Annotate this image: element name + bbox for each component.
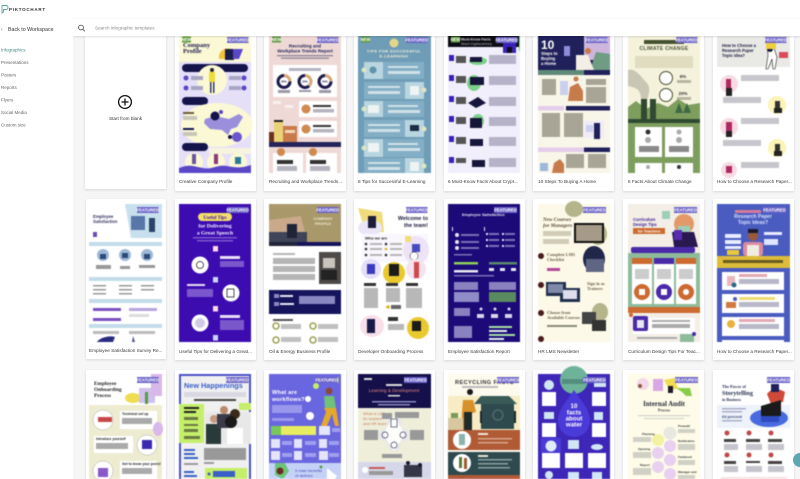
card: What are workflows: What are xyxy=(272,390,297,396)
card: Employee Onboarding Process: Get to know your peers! xyxy=(122,462,161,466)
card: Oil & Energy Business Profile xyxy=(264,199,346,360)
card: HR LMS Newsletter xyxy=(533,199,614,360)
card: 10 facts about water: 10 xyxy=(571,403,578,410)
card: Recruiting and Workplace Trends: Workplace Trends Report xyxy=(277,48,333,54)
card: Oil & Energy Business Profile: COMPANY xyxy=(313,217,333,221)
card: Learning and Development: Learning & Development xyxy=(369,388,420,393)
top header bar xyxy=(0,0,800,19)
card: The Power of Storytelling: The Power of xyxy=(722,384,746,389)
card: Internal Audit Process: Planning xyxy=(642,432,655,436)
card: 10 Steps To Buying A Home: Steps to xyxy=(541,51,558,56)
card: Useful Tips for Delivering a Great Speech: FEATURED xyxy=(226,208,249,212)
card: Useful Tips for Delivering a Great Speech: Useful Tips xyxy=(203,216,227,221)
card: How to Choose a Research Paper xyxy=(713,20,794,191)
card: Useful Tips for Delivering a Great Speech: for Delivering xyxy=(198,224,232,230)
card: Curriculum Design Tips: Curriculum xyxy=(633,217,656,222)
card: Developer Onboarding Process: the team! xyxy=(404,223,428,229)
card: How to Choose a Research Paper (blue): How to Choose a Research Paper... xyxy=(717,349,792,354)
sidebar navigation: Presentations xyxy=(1,60,29,65)
card: Internal Audit Process: Manager and xyxy=(678,470,697,474)
card: How to Choose a Research Paper: How to Choose a xyxy=(722,43,757,48)
card: 6 Facts About Climate Change: 6 Facts About Climate Change xyxy=(628,179,692,184)
card: Internal Audit Process: Report xyxy=(640,463,650,467)
card: HR LMS Newsletter: New Courses xyxy=(542,217,571,223)
card: Employee Satisfaction Survey: Employee xyxy=(93,214,114,219)
card: Curriculum Design Tips: FEATURED xyxy=(674,208,697,212)
card: 10 facts about water: facts xyxy=(567,410,582,416)
card: HR LMS Newsletter: HR LMS Newsletter xyxy=(538,349,580,354)
card: The Power of Storytelling: 63 percent xyxy=(722,414,743,419)
card: Internal Audit Process: Opening xyxy=(638,447,650,451)
card: 10 Steps To Buying A Home: Buying xyxy=(541,56,556,61)
card: Curriculum Design Tips: Design Tips xyxy=(633,222,657,227)
card: Recycling xyxy=(444,370,525,479)
card: Employee Satisfaction Report: FEATURED xyxy=(494,208,517,212)
card: Curriculum Design Tips xyxy=(623,199,704,360)
card: Internal Audit Process: Preaudit xyxy=(678,424,690,428)
card: Internal Audit Process: Notification xyxy=(678,439,695,443)
card: Employee Onboarding Process: Process xyxy=(94,393,111,399)
card: Recruiting and Workplace Trends: Recruiting and xyxy=(289,44,321,48)
card: What are workflows: workflows? xyxy=(271,397,305,403)
card: Developer Onboarding Process xyxy=(354,199,435,360)
card: HR LMS Newsletter: Checklist xyxy=(547,257,565,262)
card: Recruiting and Workplace Trends: NEW xyxy=(272,37,281,42)
card: 10 Steps To Buying A Home: 10 Steps To Buying A Home xyxy=(538,179,596,184)
card: Employee Satisfaction Survey xyxy=(86,199,166,359)
sidebar navigation: Posters xyxy=(1,72,17,78)
card: Useful Tips for Delivering a Great Speech xyxy=(175,199,256,360)
card: 10 Steps To Buying A Home: FEATURED xyxy=(585,38,608,42)
card: 10 Steps To Buying A Home: 10 xyxy=(541,38,555,52)
search bar xyxy=(73,19,800,36)
card: HR LMS Newsletter: Available Courses xyxy=(547,315,580,320)
card: How to Choose a Research Paper: Topic Idea? xyxy=(722,53,745,58)
card: What are workflows xyxy=(264,370,346,479)
card: Employee Onboarding Process: FEATURED xyxy=(136,378,159,382)
card: HR LMS Newsletter: Choose from xyxy=(547,310,571,315)
card: Recycling: RECYCLING FACTS xyxy=(455,380,514,386)
card: 6 Must-Know Facts About Crypto: About Cryptocurrency xyxy=(461,42,492,46)
card: 6 Must-Know Facts About Crypto: FEATURED xyxy=(495,38,518,42)
card: Employee Onboarding Process: Onboarding xyxy=(94,387,122,393)
card: 10 facts about water: about xyxy=(566,416,582,422)
card: 10 Steps To Buying A Home: a Home xyxy=(541,61,557,66)
card: The Power of Storytelling xyxy=(713,370,794,479)
card: Recruiting and Workplace Trends: 56% xyxy=(322,80,328,84)
card: Internal Audit Process: Fieldwork xyxy=(678,455,692,459)
card: Internal Audit Process: Internal Audit xyxy=(643,401,686,408)
card: HR LMS Newsletter: for Managers xyxy=(543,223,572,229)
card: 6 Facts About Climate Change: CLIMATE CHANGE xyxy=(639,46,689,52)
card: Creative Company Profile: FEATURED xyxy=(226,38,249,42)
card: How to Choose a Research Paper (blue): Topic Ideas? xyxy=(738,220,768,226)
card: What are workflows: of defined xyxy=(295,473,313,478)
card: The Power of Storytelling: FEATURED xyxy=(767,378,790,382)
card: start from blank: Start from blank xyxy=(109,116,143,121)
card: 8 Tips for Successful E-Learning: TIPS FOR SUCCESSFUL xyxy=(367,48,421,54)
card: Employee Onboarding Process: Introduce yourself xyxy=(96,437,126,441)
card: How to Choose a Research Paper: FEATURED xyxy=(764,38,787,42)
card: Curriculum Design Tips: Curriculum Design Tips For Teac... xyxy=(628,349,700,354)
card: Recruiting and Workplace Trends: FEATURED xyxy=(316,38,339,42)
card: Learning and Development: What is L&D xyxy=(363,411,385,416)
card: Oil & Energy Business Profile: FEATURED xyxy=(316,208,339,212)
card: Employee Onboarding Process: Technical set up xyxy=(122,412,148,416)
sidebar navigation: Infographics xyxy=(1,48,26,52)
card: Recruiting and Workplace Trends: 66% xyxy=(281,80,287,84)
sidebar navigation: Custom size xyxy=(1,122,26,128)
card: New Happenings: New Happenings xyxy=(184,381,243,390)
icon: Piktochart logo xyxy=(2,6,8,13)
card: What are workflows: FEATURED xyxy=(315,378,338,382)
card: 10 facts about water xyxy=(533,366,614,479)
card: HR LMS Newsletter: Trainers xyxy=(587,286,603,291)
card: 8 Tips for Successful E-Learning xyxy=(354,20,435,191)
card: Employee Satisfaction Survey: Satisfaction xyxy=(93,219,118,224)
card: 8 Tips for Successful E-Learning: E-LEARNING xyxy=(380,54,408,58)
card: Recruiting and Workplace Trends xyxy=(264,20,346,191)
card: Creative Company Profile: Company xyxy=(183,42,211,49)
card: HR LMS Newsletter: Sign in as xyxy=(587,281,605,286)
sidebar navigation: Social Media xyxy=(1,110,27,115)
card: Developer Onboarding Process: Developer Onboarding Process xyxy=(358,349,424,354)
card: 6 Must-Know Facts About Crypto: NEW xyxy=(451,37,460,42)
card: Employee Satisfaction Report: Employee Satisfaction Report xyxy=(448,349,510,354)
card: Creative Company Profile: Creative Company Profile xyxy=(179,179,233,184)
card: Employee Satisfaction Survey: FEATURED xyxy=(136,208,159,212)
card: Employee Satisfaction Report xyxy=(444,199,525,360)
card: 10 facts about water: FEATURED xyxy=(583,378,606,382)
card: Creative Company Profile: Profile xyxy=(183,48,202,55)
card: The Power of Storytelling: in Business xyxy=(722,397,741,402)
card: Recruiting and Workplace Trends: Recruiting and Workplace Trends... xyxy=(269,179,342,184)
card: Developer Onboarding Process: FEATURED xyxy=(405,208,428,212)
card: Recycling: FEATURED xyxy=(497,378,519,382)
card: Internal Audit Process: Process xyxy=(658,408,671,412)
card: Learning and Development xyxy=(354,370,435,479)
card: 6 Facts About Climate Change: 20% xyxy=(678,91,688,96)
card: Curriculum Design Tips: for Teachers xyxy=(638,230,660,234)
card: Oil & Energy Business Profile: PROFILE xyxy=(315,222,332,226)
card: 6 Must-Know Facts About Crypto xyxy=(444,20,525,191)
card: New Happenings: FEATURED xyxy=(226,378,248,382)
sidebar navigation: Flyers xyxy=(1,98,14,102)
sidebar navigation: Back to Workspace xyxy=(8,27,54,33)
card: Developer Onboarding Process: Welcome to xyxy=(398,216,429,222)
sidebar navigation: Reports xyxy=(1,85,18,90)
card: 6 Must-Know Facts About Crypto: 6 Must-Know Facts About Crypt... xyxy=(448,179,518,184)
card: Developer Onboarding Process: Who we are xyxy=(365,236,388,240)
card: Useful Tips for Delivering a Great Speech: a Great Speech xyxy=(197,230,234,236)
card: 10 facts about water: water xyxy=(565,422,583,428)
card: How to Choose a Research Paper (blue): Research Paper xyxy=(734,214,772,220)
chat button xyxy=(793,453,800,467)
card: Employee Onboarding Process xyxy=(86,370,166,479)
card: Employee Satisfaction Report: Employee Satisfaction xyxy=(462,212,505,217)
card: Employee Onboarding Process: Employee xyxy=(94,381,117,387)
card: New Happenings xyxy=(175,370,256,479)
card: 8 Tips for Successful E-Learning: 8 Tips for Successful E-Learning xyxy=(358,179,426,184)
card: The Power of Storytelling: Storytelling xyxy=(722,390,754,397)
card: Creative Company Profile: NEW xyxy=(182,37,191,42)
card: Internal Audit Process: FEATURED xyxy=(675,378,698,382)
card: 8 Tips for Successful E-Learning: FEATURED xyxy=(405,38,428,42)
card: What are workflows: 5 main benefits xyxy=(295,468,322,473)
card: How to Choose a Research Paper (blue) xyxy=(713,199,794,360)
card: Employee Satisfaction Survey: Employee Satisfaction Survey Re... xyxy=(89,348,162,353)
card: 6 Must-Know Facts About Crypto: Must-Know Facts xyxy=(461,38,491,42)
card: start from blank xyxy=(85,20,166,189)
card: 6 Facts About Climate Change xyxy=(623,20,704,191)
card: HR LMS Newsletter: FEATURED xyxy=(583,208,606,212)
card: Recruiting and Workplace Trends: 33% xyxy=(302,80,308,84)
logo wordmark: PIKTOCHART xyxy=(9,7,46,12)
card: Creative Company Profile xyxy=(175,20,256,191)
card: How to Choose a Research Paper: Research Paper xyxy=(722,48,754,53)
search bar: Search infographic templates xyxy=(95,26,155,30)
card: How to Choose a Research Paper (blue): FEATURED xyxy=(763,208,786,212)
card: Learning and Development: FEATURED xyxy=(404,378,427,382)
card: Useful Tips for Delivering a Great Speech: Useful Tips for Delivering a Great... xyxy=(179,349,252,354)
sidebar navigation: ‹ xyxy=(1,27,3,33)
card: Learning and Development: and HR team xyxy=(363,421,387,426)
card: Oil & Energy Business Profile: Oil & Energy Business Profile xyxy=(269,349,331,354)
card: 10 Steps To Buying A Home xyxy=(533,20,614,191)
card: Internal Audit Process xyxy=(623,370,704,479)
sidebar navigation xyxy=(0,19,73,479)
card: HR LMS Newsletter: Complete LMS xyxy=(547,252,576,257)
card: 6 Facts About Climate Change: 6% xyxy=(680,74,686,79)
card: 8 Tips for Successful E-Learning: NEW xyxy=(361,37,370,42)
card: How to Choose a Research Paper: How to Choose a Research Paper... xyxy=(717,179,792,184)
card: Learning and Development: for leaders xyxy=(363,416,382,421)
card: 6 Facts About Climate Change: FEATURED xyxy=(675,38,698,42)
